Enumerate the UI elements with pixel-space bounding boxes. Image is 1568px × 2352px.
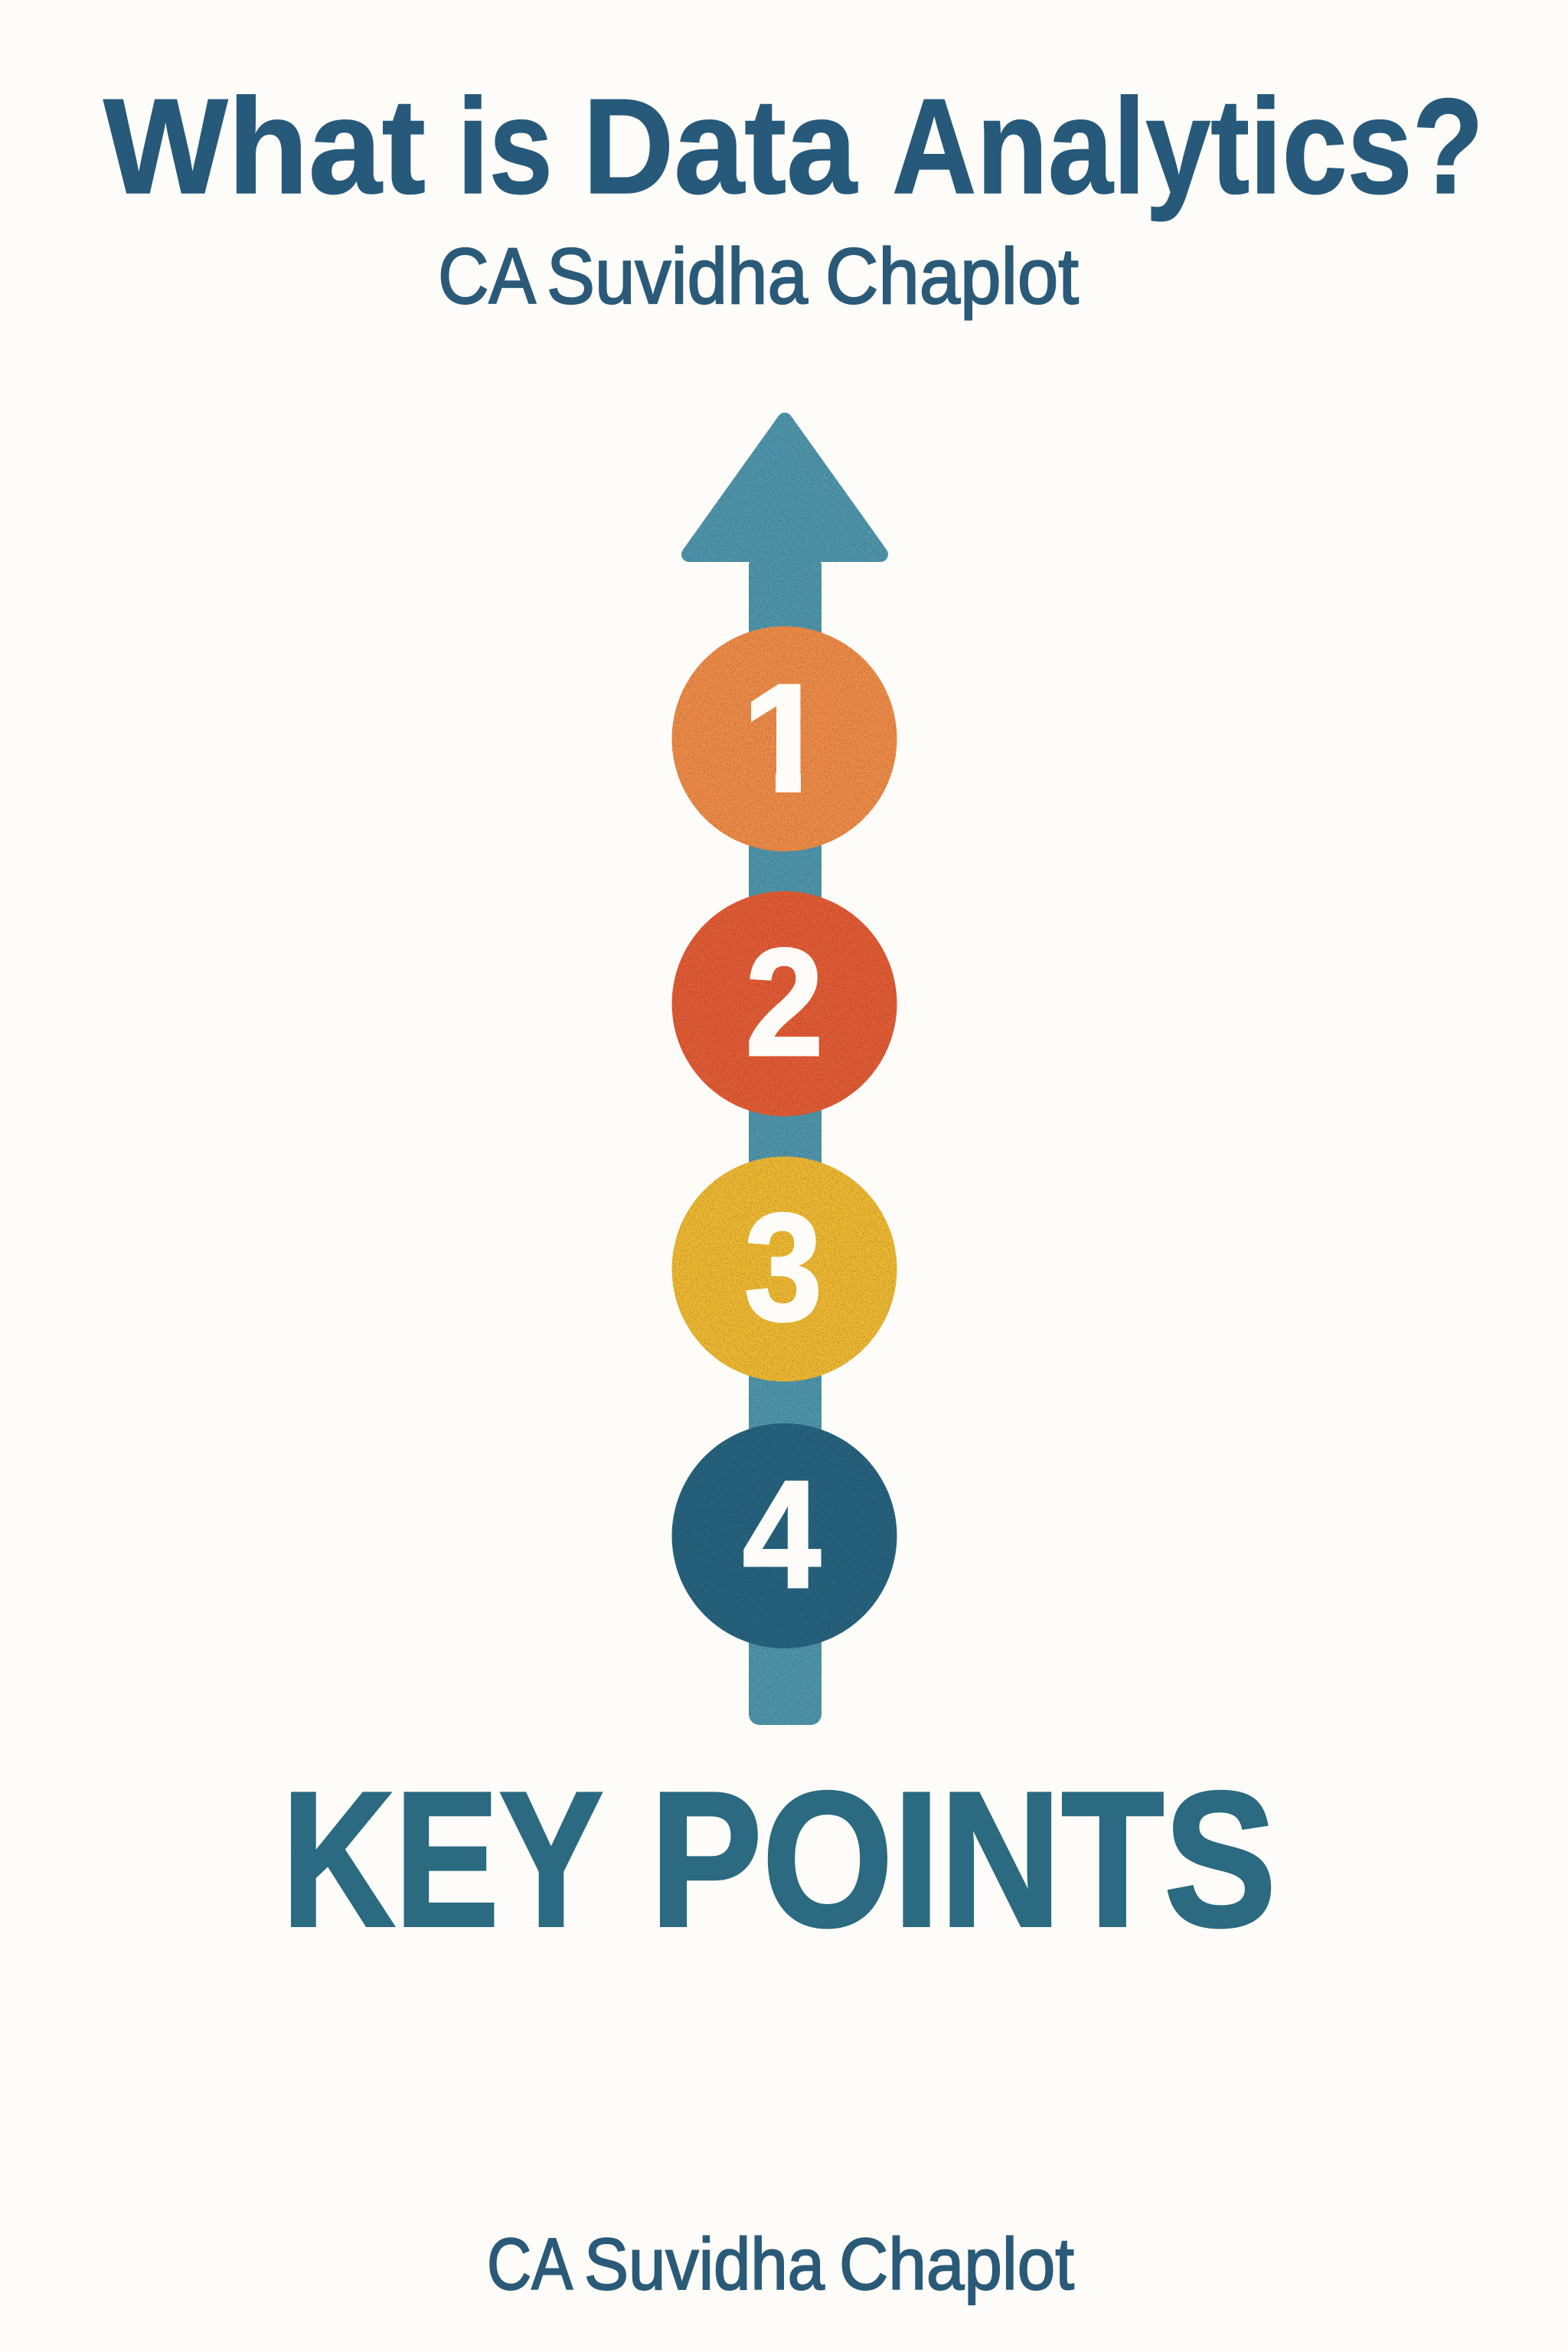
step 1 badge <box>672 626 897 851</box>
author subtitle: Chaplot <box>825 232 1079 320</box>
footer author name <box>487 2223 1074 2305</box>
footer author name: CA <box>487 2223 573 2305</box>
step 1 badge: 1 <box>742 653 828 824</box>
title <box>103 70 1484 222</box>
step 3 badge: 3 <box>744 1181 822 1353</box>
key points heading: KEY <box>282 1753 603 1967</box>
step 4 badge: 4 <box>743 1449 821 1620</box>
key points heading: POINTS <box>650 1753 1276 1967</box>
title: What <box>103 70 426 222</box>
author subtitle <box>438 232 1079 320</box>
key points heading <box>282 1753 1276 1967</box>
author subtitle: Suvidha <box>547 232 808 320</box>
icon: upward arrow <box>689 420 880 1725</box>
title: Analytics? <box>892 70 1484 222</box>
author subtitle: CA <box>438 232 536 320</box>
footer author name: Chaplot <box>839 2223 1074 2305</box>
step 4 badge <box>672 1423 897 1648</box>
title: is <box>457 70 553 222</box>
footer author name: Suvidha <box>584 2223 825 2305</box>
step 2 badge: 2 <box>745 916 824 1088</box>
step 3 badge <box>672 1156 897 1381</box>
step 2 badge <box>672 891 897 1116</box>
title: Data <box>583 70 858 222</box>
